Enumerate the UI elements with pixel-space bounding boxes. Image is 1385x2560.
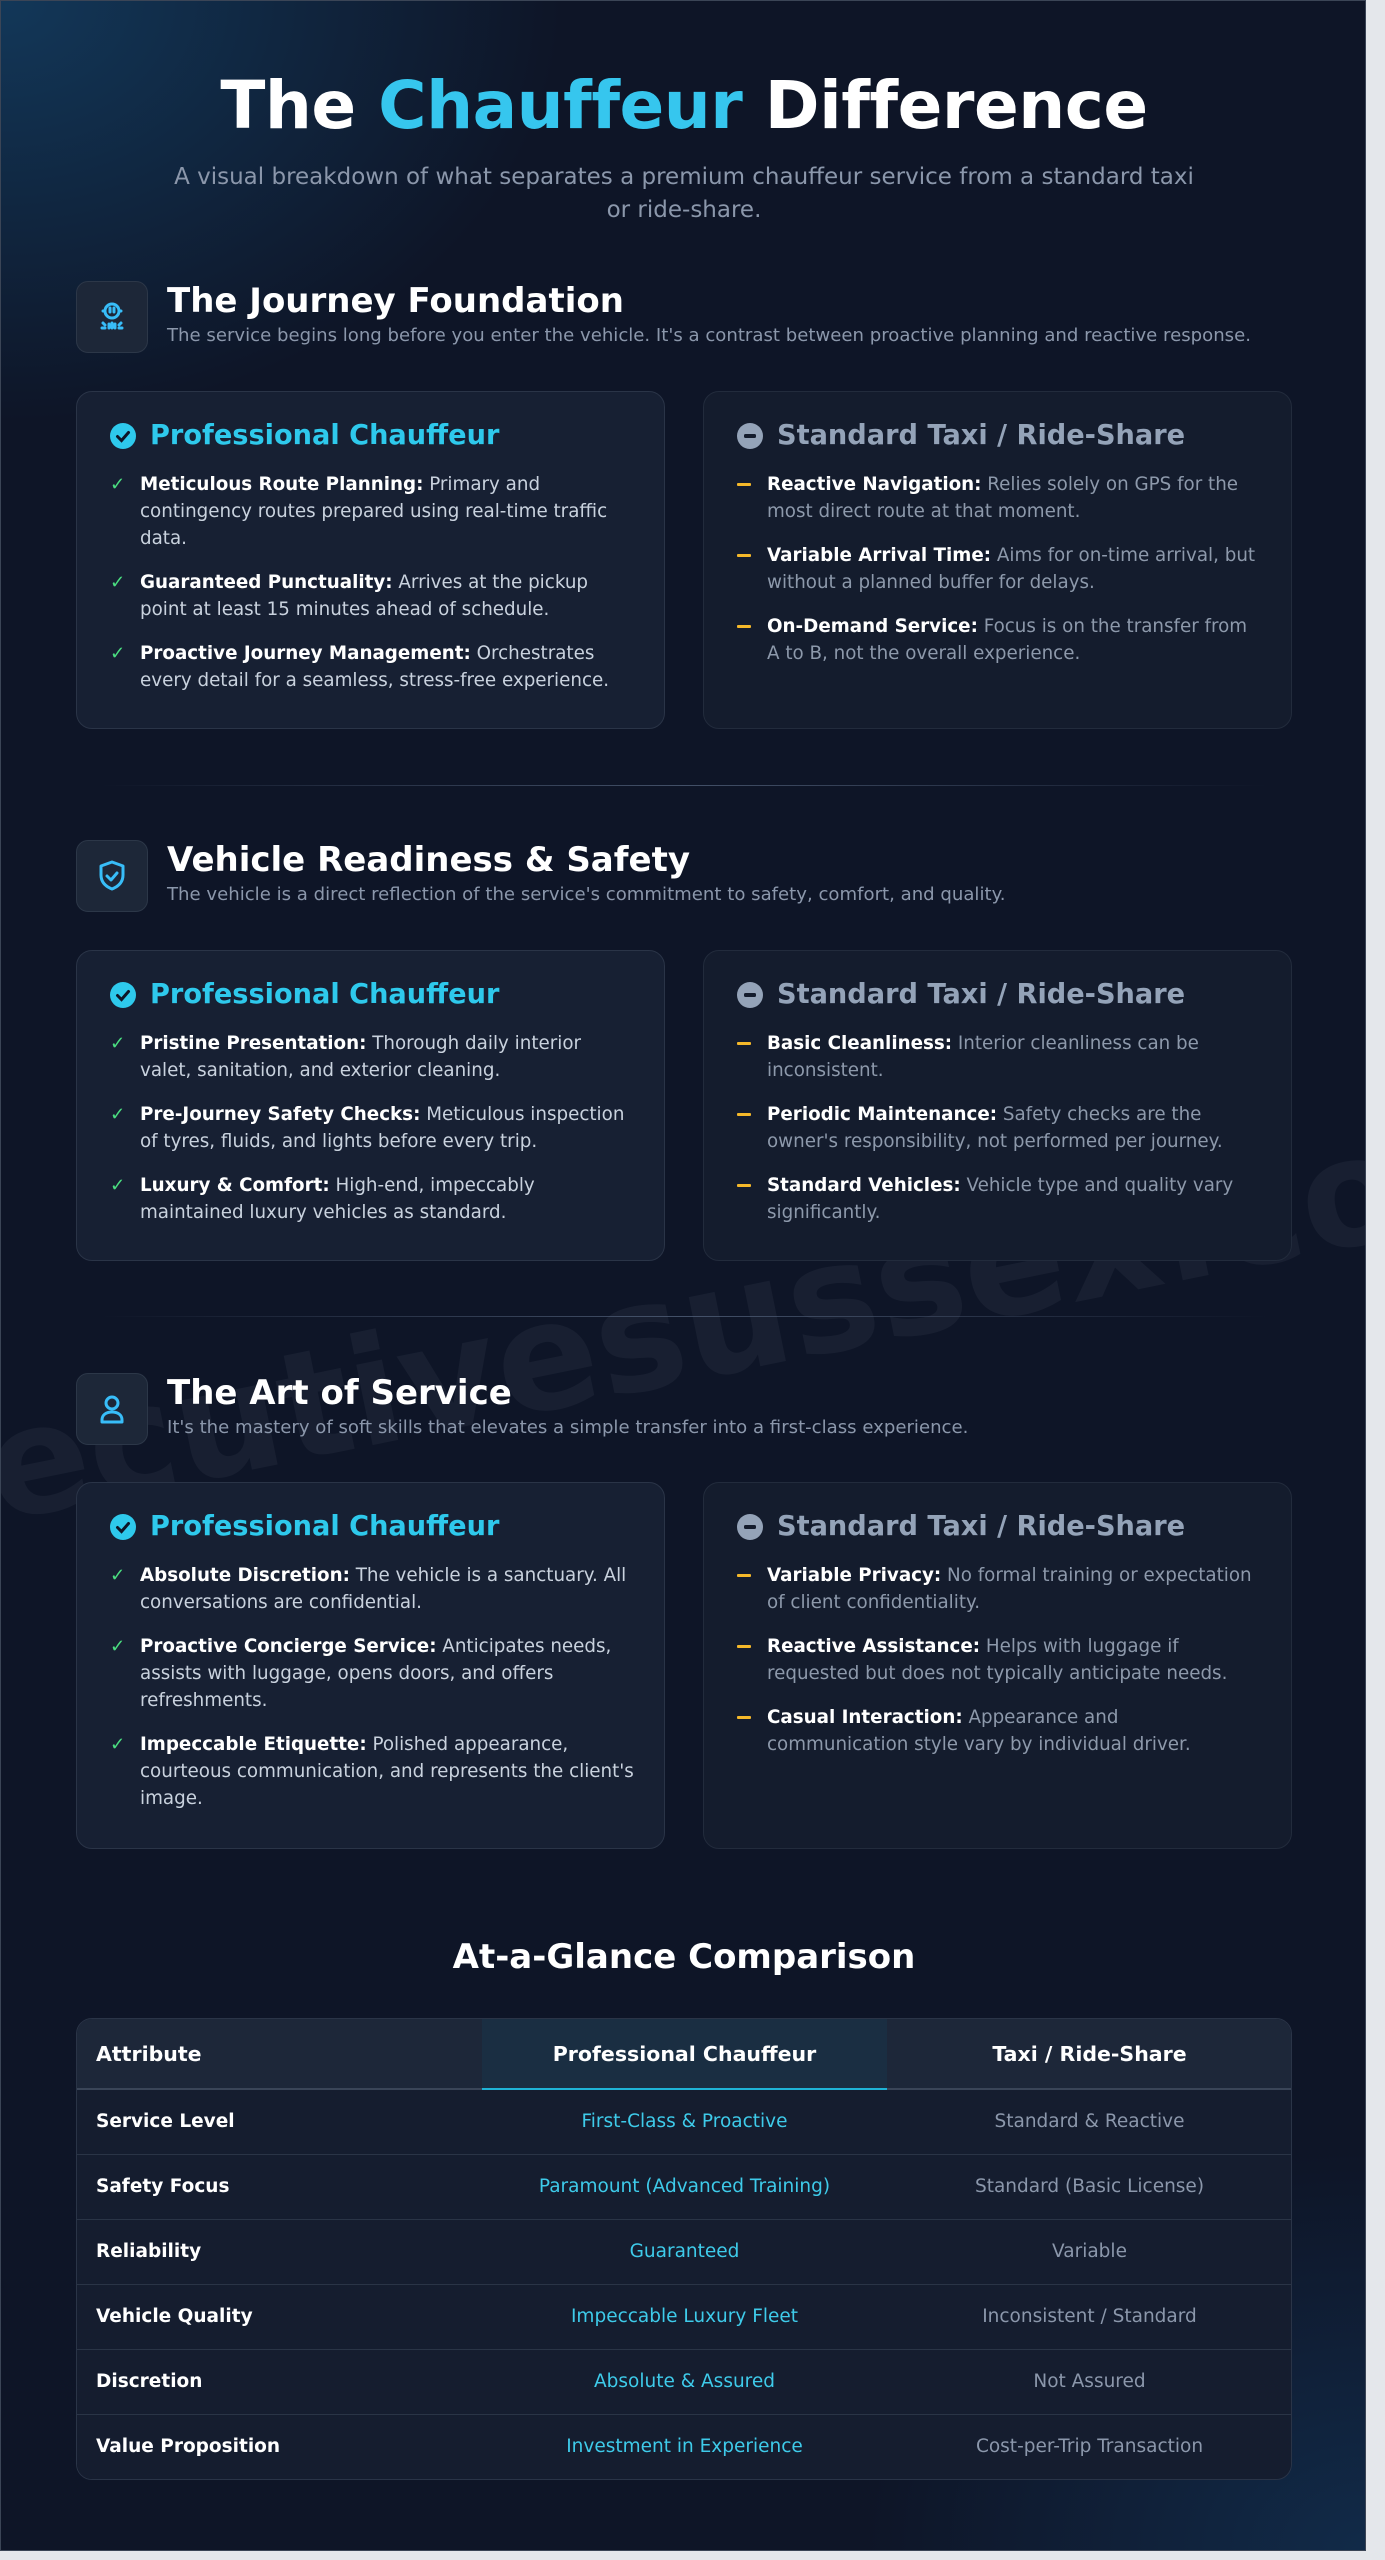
item: Meticulous Route Planning: Primary and contingency routes prepared using real-time traffic data.	[140, 474, 607, 549]
section 2 heading: Vehicle Readiness & Safety	[167, 840, 690, 880]
item: ✓	[110, 1175, 125, 1196]
heading: taxi: Standard Taxi / Ride-Share	[777, 420, 1185, 451]
section 3 description: It's the mastery of soft skills that elevates a simple transfer into a first-class experience.	[167, 1417, 968, 1438]
item: Variable Privacy: No formal training or expectation of client confidentiality.	[767, 1565, 1252, 1613]
subtitle: A visual breakdown of what separates a premium chauffeur service from a standard taxi or ride-share.	[174, 164, 1194, 223]
item: Pristine Presentation: Thorough daily interior valet, sanitation, and exterior cleaning.	[140, 1033, 581, 1081]
item: Impeccable Etiquette: Polished appearance, courteous communication, and represents the client's image.	[140, 1734, 634, 1809]
panel: journey chauffeur	[76, 391, 665, 729]
heading: Professional Chauffeur	[150, 1511, 499, 1542]
panel: vehicle chauffeur	[76, 950, 665, 1261]
item: On-Demand Service: Focus is on the transfer from A to B, not the overall experience.	[767, 616, 1247, 664]
comparison table: Variable	[1052, 2241, 1127, 2262]
comparison heading: At-a-Glance Comparison	[453, 1937, 915, 1977]
section 1 heading: The Journey Foundation	[167, 281, 624, 321]
comparison table: Absolute & Assured	[594, 2371, 775, 2392]
title: The Chauffeur Difference	[220, 67, 1148, 144]
comparison table: Cost-per-Trip Transaction	[976, 2436, 1203, 2457]
comparison table: Standard (Basic License)	[975, 2176, 1204, 2197]
comparison table: Inconsistent / Standard	[982, 2306, 1197, 2327]
comparison table: Impeccable Luxury Fleet	[571, 2306, 798, 2327]
comparison table: Standard & Reactive	[994, 2111, 1184, 2132]
comparison table	[76, 2018, 1292, 2480]
item: Standard Vehicles: Vehicle type and quality vary significantly.	[767, 1175, 1233, 1223]
comparison table: Safety Focus	[96, 2176, 230, 2197]
item: Proactive Journey Management: Orchestrates every detail for a seamless, stress-free experience.	[140, 643, 609, 691]
panel: vehicle taxi	[703, 950, 1292, 1261]
comparison table: Discretion	[96, 2371, 202, 2392]
comparison table: Reliability	[96, 2241, 201, 2262]
item: Guaranteed Punctuality: Arrives at the pickup point at least 15 minutes ahead of schedule.	[140, 572, 588, 620]
comparison table: Paramount (Advanced Training)	[539, 2176, 830, 2197]
item: Pre-Journey Safety Checks: Meticulous inspection of tyres, fluids, and lights before every trip.	[140, 1104, 624, 1152]
item: ✓	[110, 1565, 125, 1586]
item: ✓	[110, 1636, 125, 1657]
comparison table: Professional Chauffeur	[553, 2042, 816, 2066]
heading: Professional Chauffeur	[150, 979, 499, 1010]
section 3 heading: The Art of Service	[167, 1373, 512, 1413]
comparison table: Taxi / Ride-Share	[992, 2042, 1187, 2066]
comparison table: Investment in Experience	[566, 2436, 803, 2457]
comparison table: Guaranteed	[630, 2241, 739, 2262]
item: Variable Arrival Time: Aims for on-time arrival, but without a planned buffer for delays.	[767, 545, 1255, 593]
section 2 icon	[76, 840, 148, 912]
item: Luxury & Comfort: High-end, impeccably maintained luxury vehicles as standard.	[140, 1175, 535, 1223]
comparison table: Value Proposition	[96, 2436, 280, 2457]
item: Proactive Concierge Service: Anticipates needs, assists with luggage, opens doors, and offers refreshments.	[140, 1636, 611, 1711]
item: Absolute Discretion: The vehicle is a sanctuary. All conversations are confidential.	[140, 1565, 626, 1613]
item: ✓	[110, 1734, 125, 1755]
panel: service taxi	[703, 1482, 1292, 1849]
item: Casual Interaction: Appearance and communication style vary by individual driver.	[767, 1707, 1191, 1755]
panel: journey taxi	[703, 391, 1292, 729]
section 1 description: The service begins long before you enter the vehicle. It's a contrast between proactive planning and reactive response.	[167, 325, 1251, 346]
comparison table: Service Level	[96, 2111, 235, 2132]
item: ✓	[110, 643, 125, 664]
heading: Standard Taxi / Ride-Share	[777, 1511, 1185, 1542]
item: Periodic Maintenance: Safety checks are the owner's responsibility, not performed per journey.	[767, 1104, 1223, 1152]
comparison table: Vehicle Quality	[96, 2306, 253, 2327]
section 3 icon	[76, 1373, 148, 1445]
heading: Standard Taxi / Ride-Share	[777, 979, 1185, 1010]
item: ✓	[110, 1033, 125, 1054]
item: Basic Cleanliness: Interior cleanliness can be inconsistent.	[767, 1033, 1199, 1081]
item: Reactive Navigation: Relies solely on GPS for the most direct route at that moment.	[767, 474, 1238, 522]
comparison table: Attribute	[96, 2042, 202, 2066]
section 2 description: The vehicle is a direct reflection of the service's commitment to safety, comfort, and quality.	[167, 884, 1005, 905]
item: ✓	[110, 572, 125, 593]
heading: professional chauffeur: Professional Chauffeur	[150, 420, 499, 451]
comparison table: First-Class & Proactive	[581, 2111, 788, 2132]
section 1 icon	[76, 281, 148, 353]
comparison table: Not Assured	[1033, 2371, 1146, 2392]
item: ✓	[110, 1104, 125, 1125]
item: ✓	[110, 474, 125, 495]
item: Reactive Assistance: Helps with luggage if requested but does not typically anticipate needs.	[767, 1636, 1227, 1684]
panel: service chauffeur	[76, 1482, 665, 1849]
